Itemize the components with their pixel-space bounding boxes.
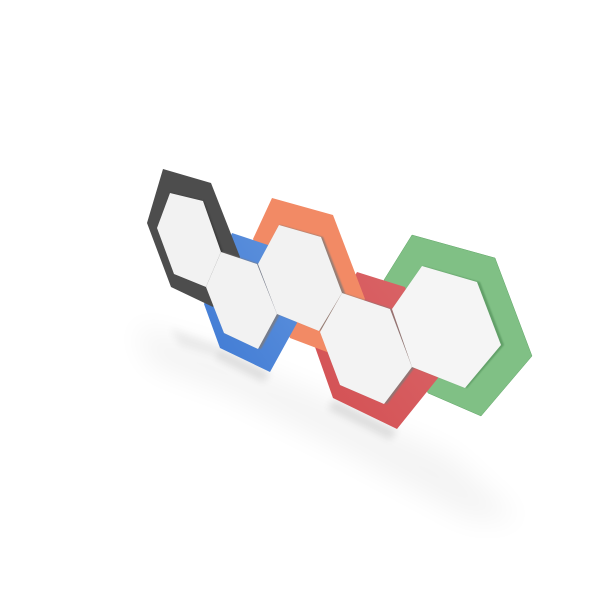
hexagon: white panel 2: [206, 252, 280, 349]
hexagon: white panel 1: [157, 193, 223, 287]
hexagon: white panel 5: [392, 266, 504, 388]
hexagon: white panel 4: [320, 293, 415, 404]
hexagon: red outer frame: [315, 272, 438, 429]
floor shadow: [135, 325, 520, 520]
hexagon: blue outer frame: [204, 233, 297, 372]
hexagon: white panel 3: [258, 225, 345, 331]
hexagon: green outer frame: [384, 235, 532, 416]
hexagon: dark grey outer frame: [147, 169, 240, 307]
hexagon: orange outer frame: [253, 198, 365, 352]
